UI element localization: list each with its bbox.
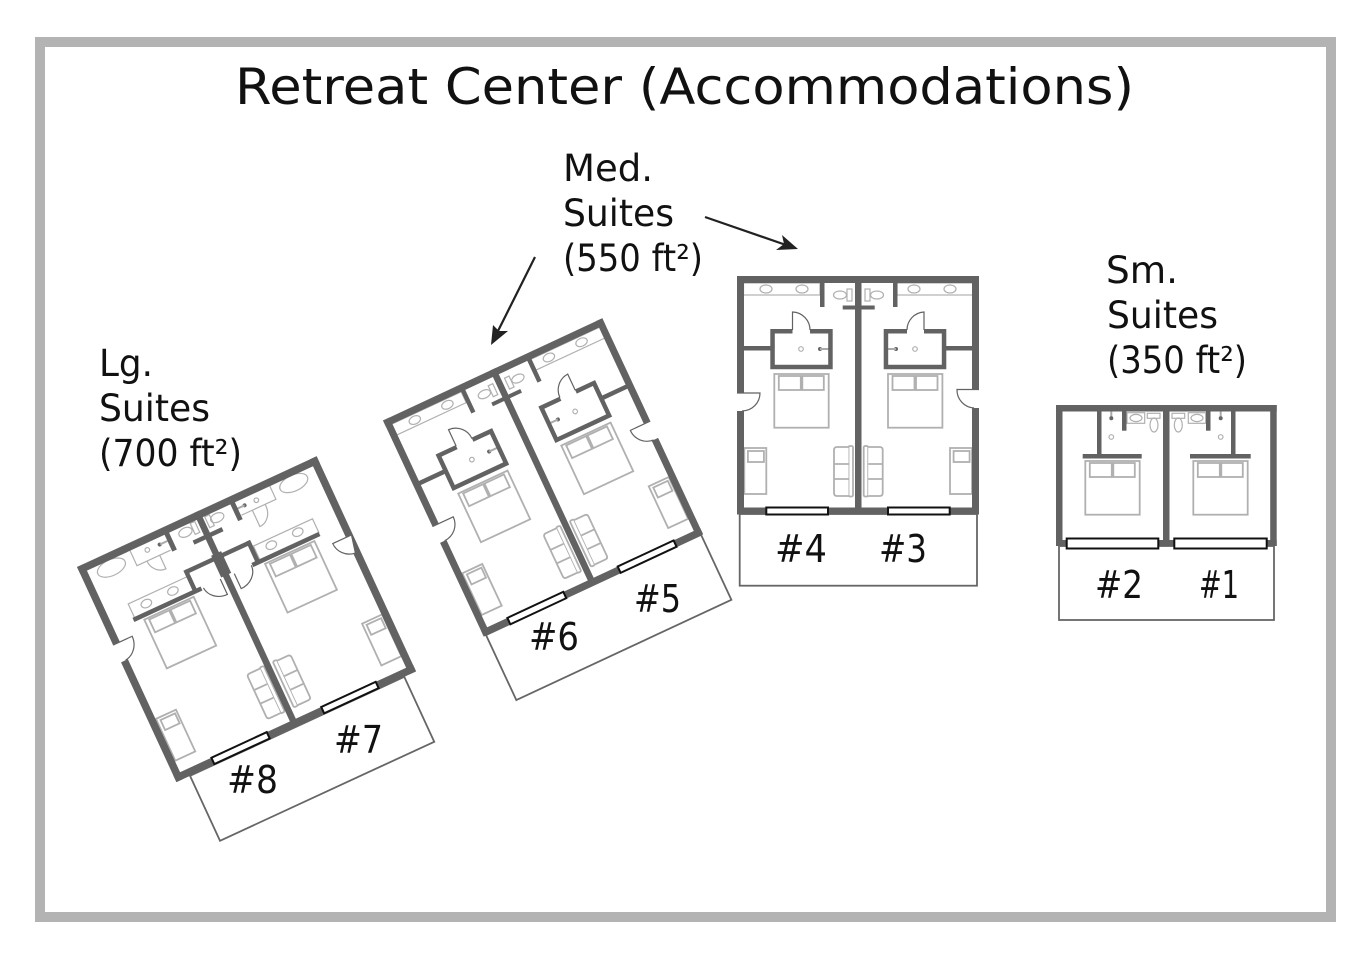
suite numbers [227,527,1239,802]
arrow: to suites 5 and 6 [491,257,535,345]
vanities and fixtures [392,327,629,486]
bathroom fixtures [1109,411,1223,439]
vanities and fixtures [744,283,973,351]
label: large suites: Suites [99,387,210,430]
exterior doors [431,421,659,543]
balcony [486,535,731,700]
label: medium suites: (550 ft²) [563,237,703,280]
beds [144,597,216,668]
walls [77,456,416,782]
exterior doors [113,535,359,662]
sofas [834,446,853,496]
suite numbers: #8 [227,758,278,802]
beds [458,471,530,542]
label: medium suites [563,147,703,280]
suite numbers: #4 [775,527,827,571]
daybeds [156,710,195,761]
label: large suites: (700 ft²) [99,432,242,475]
floor plan: large suites 7 and 8 [77,456,446,847]
sofas [246,666,285,720]
floor plan: medium suites 5 and 6 [383,318,733,701]
windows [1067,538,1158,548]
suite numbers: #5 [634,577,681,621]
floor plan: small suites 1 and 2 [1056,405,1277,620]
sofas [543,526,581,579]
balcony [740,514,977,586]
label: medium suites: Suites [563,192,674,235]
windows [211,732,270,764]
daybeds [744,448,766,494]
beds [774,374,829,428]
walls [383,318,703,637]
beds [1085,461,1140,515]
closet doors [449,374,575,446]
title: Retreat Center (Accommodations) [235,58,1134,116]
label: large suites: Lg. [99,342,153,385]
bathroom fixtures [94,468,331,624]
closet doors [792,312,924,330]
walls [737,276,979,514]
suite numbers: #7 [334,718,383,762]
label: small suites: (350 ft²) [1107,339,1247,382]
balcony [1059,546,1274,620]
exterior doors [737,390,979,411]
suite numbers: #3 [879,527,927,571]
daybeds [462,564,502,615]
arrow: to suites 3 and 4 [705,217,798,250]
windows [766,508,828,514]
suite numbers: #6 [529,615,579,659]
suite numbers: #1 [1199,563,1239,607]
suite numbers: #2 [1095,563,1143,607]
floor plan: suites 3 and 4 [737,276,979,586]
label: small suites: Sm. [1106,249,1178,292]
label: medium suites: Med. [563,147,653,190]
label: large suites [99,342,242,475]
windows [507,592,566,624]
label: small suites: Suites [1107,294,1218,337]
balcony [190,677,434,841]
walls [1056,405,1277,546]
label: small suites [1106,249,1247,382]
interior closet doors [203,565,258,603]
